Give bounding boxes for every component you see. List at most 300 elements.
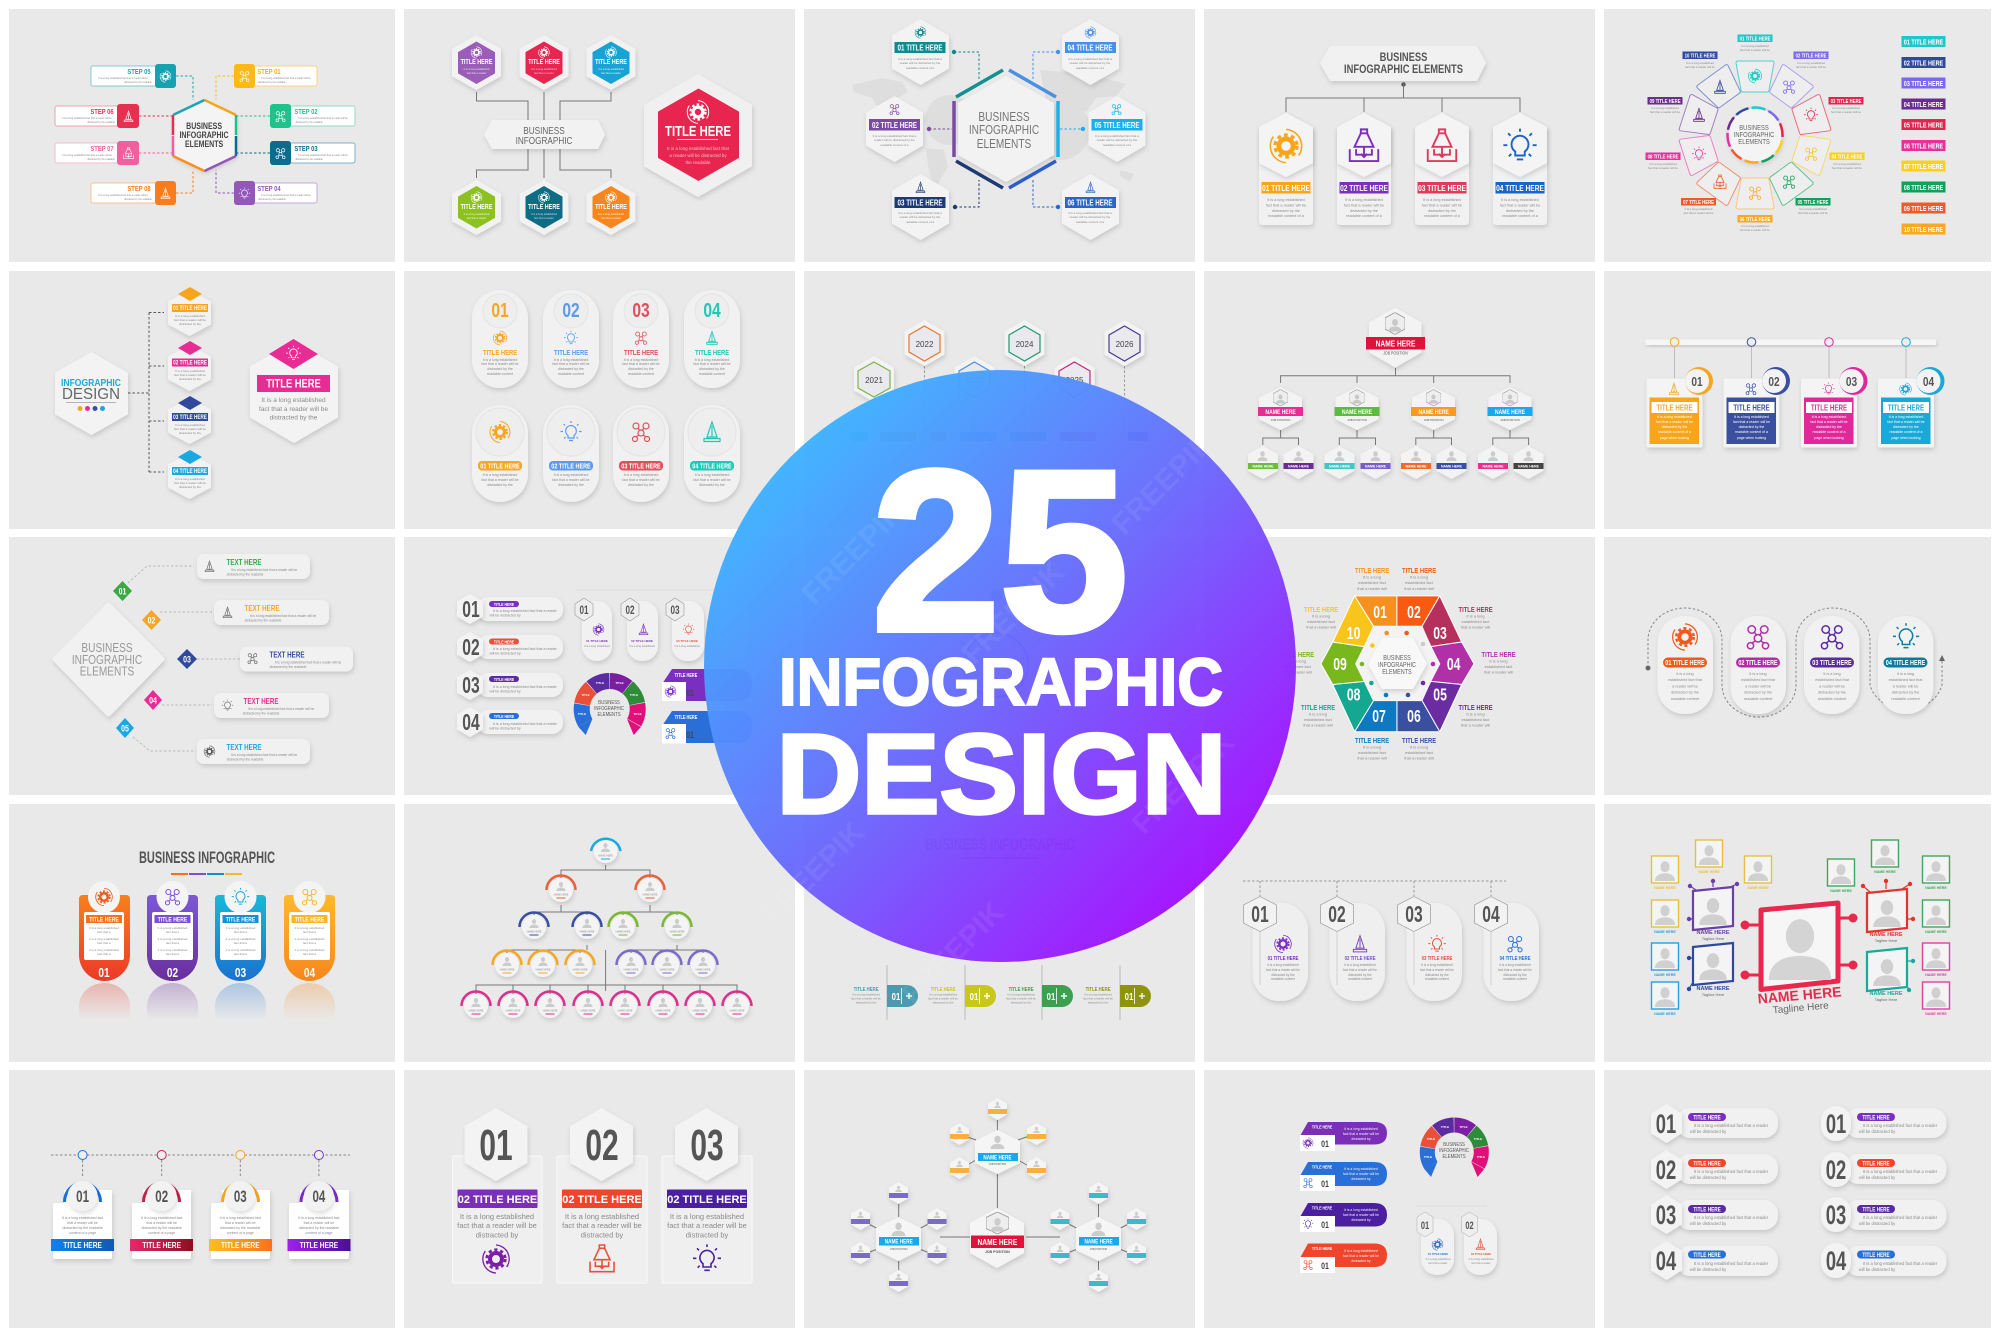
card 01: fact that a reader will be: [1266, 204, 1306, 208]
list item 04: 04: [462, 710, 480, 736]
small pill 01: 01 TITLE HERE: [1428, 1252, 1448, 1256]
pill 03: 03 TITLE HERE: [1812, 659, 1852, 667]
segment numbers: 07: [1372, 707, 1386, 727]
large title hexagon: [250, 339, 338, 443]
satellite nodes yellow: [950, 1098, 1046, 1179]
title list: 08 TITLE HERE: [1904, 184, 1943, 192]
banner 04: TITLE HERE: [1312, 1246, 1332, 1251]
segment labels: TITLE HERE: [1459, 704, 1493, 712]
card 01: readable content of a: [1268, 214, 1305, 218]
list item 04: will be distracted by: [489, 726, 521, 730]
text card 01: TEXT HERE: [227, 558, 262, 567]
text card 04: distracted by the readable: [243, 712, 280, 716]
panel: four pills with dashed path: [1604, 537, 1991, 795]
card 04: [1878, 338, 1944, 448]
number card 01: distracted by: [476, 1230, 519, 1240]
timeline card 03: TITLE HERE: [221, 1240, 260, 1250]
segment labels: TITLE HERE: [1482, 651, 1516, 659]
card 03: fact that a reader will be: [1810, 420, 1848, 424]
pill 07: It is a long established: [624, 473, 658, 477]
title banner: INFOGRAPHIC ELEMENTS: [1344, 63, 1463, 76]
level five names: NAME HERE: [543, 1010, 558, 1012]
segment labels: It is a long: [1410, 744, 1428, 750]
01 title hexagon: readable content of a: [906, 66, 934, 70]
second-level names: Tagline Here: [1702, 936, 1725, 941]
panel: timeline arc cards: [9, 1070, 395, 1328]
segment labels: established fact: [1405, 750, 1434, 755]
tab 04: [1083, 985, 1151, 1007]
column 01: 01: [98, 966, 110, 980]
segment labels: It is a long: [1309, 712, 1327, 716]
column 03: It is a long established: [226, 948, 256, 952]
card 02: 02 TITLE HERE: [1340, 183, 1388, 193]
pill 04: readable content: [1891, 697, 1921, 701]
banner 03: 01: [1321, 1220, 1329, 1230]
column 03: fact that a: [234, 941, 247, 945]
segment labels: It is a long: [1489, 658, 1508, 664]
level two names: NAME HERE: [643, 894, 658, 896]
column 04: It is a long established: [295, 926, 325, 930]
panel: diamond infographic: [9, 537, 395, 795]
list item 03: will be distracted by: [489, 690, 521, 694]
card 04: TITLE HERE: [1888, 404, 1924, 413]
pill 01: fact that a reader will be: [481, 362, 519, 366]
level five names: [469, 1010, 745, 1014]
purple hexagon: fact that a reader: [467, 71, 486, 75]
ring chart: ELEMENTS: [1443, 1154, 1466, 1160]
text card 05: It is a long established fact that a reader will be: [231, 753, 297, 757]
column 03: [215, 881, 266, 1020]
right column list: will be distracted by: [1859, 1221, 1896, 1226]
tab 02: [928, 985, 996, 1007]
second-level node green: JOB POSITION: [1347, 418, 1367, 422]
step labels: fact that a reader will be: [1650, 110, 1680, 114]
column 04: TITLE HERE: [295, 917, 324, 924]
text card 04: TEXT HERE: [244, 697, 279, 706]
column 04: 04: [304, 966, 316, 980]
card 01: [1259, 113, 1313, 225]
number card 01: [452, 1108, 542, 1283]
outer small names: NAME HERE: [1654, 1012, 1676, 1016]
item 01: distracted by the: [179, 322, 201, 326]
timeline card 01: TITLE HERE: [63, 1240, 102, 1250]
left column list: 01: [1656, 1108, 1676, 1139]
segment labels: It is a long: [1312, 614, 1330, 618]
item 02: distracted by the: [179, 377, 201, 381]
column 01: fact that a: [97, 952, 111, 956]
second-level frames: [1693, 887, 1907, 991]
step 08 card: STEP 08: [127, 185, 151, 193]
text card 03: TEXT HERE: [270, 651, 305, 660]
red hexagon: [520, 35, 568, 90]
outer small names: NAME HERE: [1874, 870, 1896, 874]
05 title hexagon: It is a long established fact that a: [1095, 134, 1139, 138]
column 02: It is a long established: [158, 926, 188, 930]
central ring: BUSINESS: [1739, 124, 1769, 132]
level five names: NAME HERE: [506, 1010, 521, 1012]
left column list: will be distracted by: [1690, 1267, 1727, 1272]
hexagon: business infographic elements: INFOGRAPHIC: [179, 130, 229, 140]
outer small names: NAME HERE: [1925, 1012, 1947, 1016]
06 title hexagon: readable content of a: [1076, 220, 1104, 224]
list item 03: It is a long established fact that a reader: [493, 685, 558, 689]
card 01: [1646, 338, 1713, 448]
segment labels: established fact: [1307, 619, 1336, 624]
tab 01: [851, 985, 918, 1007]
segment labels: It is a long: [1363, 744, 1381, 750]
number card 02: fact that a reader will be: [562, 1221, 642, 1230]
segment labels: TITLE HERE: [1402, 567, 1437, 575]
banner 04: distracted by: [1351, 1259, 1371, 1263]
pill 08: It is a long established: [695, 473, 729, 477]
card 01: distracted by the: [1662, 425, 1687, 429]
card 01: It is a long established: [1657, 415, 1692, 419]
top arc node: [591, 839, 620, 863]
level five names: NAME HERE: [581, 1010, 596, 1012]
text card 03: [240, 646, 353, 672]
left node: [876, 1217, 921, 1261]
level four names: NAME HERE: [536, 968, 551, 972]
pill 02: 02 TITLE HERE: [1738, 659, 1778, 667]
column 02: [147, 881, 198, 1020]
pill 02: [543, 290, 599, 388]
card 01: fact that a reader will be: [1656, 420, 1693, 424]
pill 01: a reader will be: [1672, 684, 1698, 688]
03 title hexagon: 03 TITLE HERE: [898, 199, 943, 208]
level five names: NAME HERE: [469, 1010, 484, 1012]
2023 hexagon: [954, 356, 994, 402]
pill 02: fact that a reader will be: [552, 362, 590, 366]
item 04: It is a long established: [1499, 963, 1531, 967]
column 02: It is a long established: [158, 937, 188, 941]
ring chart: TITLE: [596, 681, 604, 685]
number pills: [575, 598, 749, 661]
centre hexagon label: ELEMENTS: [1382, 668, 1412, 676]
satellite nodes purple: [851, 1182, 946, 1292]
step 04 card: It is a long established fact that a reader will be: [261, 194, 312, 197]
column 03: TITLE HERE: [226, 917, 255, 924]
card 04: 04 TITLE HERE: [1496, 183, 1544, 193]
card 03: It is a long established: [1812, 415, 1846, 419]
06 title hexagon: [1062, 174, 1119, 240]
right column list: 03: [1826, 1199, 1846, 1230]
step 01 card: It is a long established fact that a reader will be: [261, 77, 312, 80]
tab 03: TITLE HERE: [1009, 987, 1034, 993]
title list: 04 TITLE HERE: [1904, 101, 1943, 109]
2025 hexagon: [1054, 356, 1094, 402]
pill 06: It is a long established: [554, 473, 588, 477]
banner 01: fact that a reader will be: [1343, 1132, 1379, 1136]
number card 02: distracted by: [581, 1230, 624, 1240]
text card 01: distracted by the readable: [227, 572, 264, 576]
top node: JOB POSITION: [1383, 350, 1408, 356]
step labels: 03 TITLE HERE: [1831, 99, 1862, 105]
timeline card 03: It is a long established fact: [220, 1216, 261, 1220]
segment numbers: 03: [1433, 624, 1447, 644]
banner 04: It is a long established: [1344, 1249, 1378, 1253]
number card 02: 02 TITLE HERE: [562, 1194, 642, 1206]
number pills: 03: [671, 605, 680, 618]
right column list: TITLE HERE: [1862, 1115, 1890, 1122]
step 08 card: It is a long established fact that a reader will be: [98, 194, 149, 197]
card 02: distracted by the: [1739, 425, 1764, 429]
large title hexagon: TITLE HERE: [266, 377, 321, 391]
step 08 card: [91, 181, 176, 205]
watermarks: FREEPIK: [956, 555, 1071, 671]
01 title hexagon: [892, 19, 949, 85]
step 03 card: distracted by the readable: [295, 158, 323, 161]
2022 hexagon: [904, 320, 944, 366]
title list: 02 TITLE HERE: [1904, 60, 1943, 68]
step labels: 02 TITLE HERE: [1796, 53, 1827, 60]
badge 01: 01: [119, 587, 127, 597]
list item 02: [457, 632, 563, 662]
column 01: TITLE HERE: [89, 917, 119, 924]
centre gradient circle: [704, 370, 1296, 1011]
02 title hexagon: reader will be distracted by the: [874, 138, 915, 142]
step 07 card: It is a long established fact that a reader will be: [62, 154, 113, 157]
card 02: fact that a reader will be: [1344, 204, 1384, 208]
number card 03: It is a long established: [670, 1212, 744, 1221]
step 04 card: STEP 04: [257, 185, 281, 193]
ring chart: BUSINESS: [1443, 1142, 1466, 1148]
segment labels: that a reader will: [1461, 624, 1490, 630]
title list: 07 TITLE HERE: [1904, 163, 1943, 171]
card 01: distracted by the: [1272, 209, 1300, 213]
item 04: fact that a reader will be: [174, 481, 206, 485]
second-level node blue: JOB POSITION: [1500, 418, 1520, 422]
pill 01: 01 TITLE HERE: [1665, 659, 1705, 667]
step 06 card: distracted by the readable: [87, 121, 115, 124]
step labels: It is a long established: [1686, 61, 1714, 65]
step 05 card: STEP 05: [127, 68, 151, 76]
big red hexagon: [644, 74, 752, 197]
pill 06: [543, 405, 599, 502]
tab 01: distracted by the: [856, 1000, 877, 1004]
column 04: [284, 881, 335, 1020]
left column list: 04: [1656, 1245, 1676, 1276]
pill 01: It is a long established: [483, 358, 517, 362]
item 02: It is a long established: [1344, 963, 1376, 967]
third-level nodes: NAME HERE: [1252, 465, 1274, 469]
ring chart: [1416, 1114, 1492, 1190]
second-level node pink: NAME HERE: [1265, 410, 1296, 416]
tab 03: [1006, 985, 1073, 1007]
2024 hexagon: 2024: [1016, 340, 1034, 349]
second-level names: NAME HERE: [1869, 932, 1903, 938]
segment labels: TITLE HERE: [1301, 704, 1336, 712]
panel: arc organisation chart: [404, 804, 795, 1062]
central hexagon: [954, 70, 1058, 188]
level three names: NAME HERE: [670, 930, 685, 934]
text card 04: It is a long established fact that a reader will be: [248, 707, 314, 711]
right column list: will be distracted by: [1859, 1129, 1896, 1134]
small pill 02: 02 TITLE HERE: [1471, 1252, 1491, 1256]
tab 02: fact that a reader will be: [928, 996, 958, 1000]
text card 05: TEXT HERE: [227, 743, 262, 752]
segment labels: TITLE HERE: [1304, 606, 1339, 614]
right column list: [1821, 1106, 1946, 1278]
right column list: will be distracted by: [1859, 1175, 1896, 1180]
level four names: NAME HERE: [696, 968, 711, 972]
column 03: 03: [235, 966, 247, 980]
item 03: [1398, 896, 1462, 1001]
item 04: fact that a reader will be: [1498, 968, 1532, 972]
column 02: TITLE HERE: [158, 917, 187, 924]
top arc node: NAME HERE: [598, 854, 613, 858]
banner 04: 01: [1321, 1261, 1329, 1271]
tab 04: fact that a reader will be: [1083, 996, 1113, 1000]
panel: hexagon ring ten steps: [1204, 537, 1595, 795]
timeline card 01: content of a page: [69, 1231, 96, 1235]
ring chart: TITLE: [1477, 1155, 1485, 1159]
panel: business infographic tabs: [804, 804, 1195, 1062]
step labels: 10 TITLE HERE: [1685, 53, 1716, 60]
item 04: distracted by the: [1503, 973, 1527, 977]
card 04: distracted by the: [1893, 425, 1919, 429]
tab 01: It is a long established: [852, 992, 880, 996]
pill 04: [1878, 616, 1934, 714]
segment labels: established fact: [1462, 717, 1490, 722]
list item 01: will be distracted by: [489, 614, 521, 618]
step labels: fact that a reader will be: [1685, 65, 1715, 69]
timeline card 04: content of a page: [305, 1231, 332, 1235]
pill 04: readable content: [699, 372, 725, 376]
main hexagon: [55, 352, 128, 435]
step labels: fact that a reader will be: [1798, 211, 1828, 215]
second-level names: Tagline Here: [1702, 992, 1725, 997]
column 01: fact that a: [97, 941, 111, 945]
item 01: fact that a reader will be: [1266, 968, 1300, 972]
left column list: 03: [1656, 1199, 1676, 1230]
04 title hexagon: 04 TITLE HERE: [1068, 44, 1113, 53]
card 02: [1724, 338, 1790, 448]
2025 hexagon: 2025: [1066, 376, 1084, 385]
text card 04: [214, 693, 329, 718]
pill 02: 02: [562, 299, 580, 321]
column 04: fact that a: [303, 930, 316, 934]
card 03: TITLE HERE: [1811, 404, 1847, 413]
pill 02: distracted by the: [1744, 690, 1772, 694]
segment numbers: 08: [1347, 685, 1361, 705]
pill 04: distracted by the: [1892, 690, 1919, 694]
hexagon: business infographic elements: [173, 100, 236, 171]
small pill 02: It is a long established: [1469, 1258, 1494, 1261]
item 01: readable content: [1271, 977, 1295, 981]
step labels: 09 TITLE HERE: [1650, 99, 1681, 105]
outer small names: NAME HERE: [1654, 973, 1676, 977]
item 02: readable content: [1348, 977, 1372, 981]
left column list: It is a long established fact that a reader: [1694, 1123, 1769, 1128]
number card 03: [662, 1108, 752, 1283]
banner 01: It is a long established: [1344, 1127, 1378, 1131]
tab 04: It is a long established: [1084, 992, 1112, 996]
timeline card 03: that a reader will be: [225, 1221, 256, 1225]
pill 04: 04: [703, 299, 721, 321]
list item 04: TITLE HERE: [494, 714, 514, 719]
pill 04: It is a long: [1897, 672, 1914, 676]
pill 04: TITLE HERE: [695, 349, 730, 357]
left column list: will be distracted by: [1690, 1129, 1727, 1134]
segment labels: [1280, 567, 1516, 760]
segment labels: It is a long: [1363, 574, 1381, 580]
02 title hexagon: [866, 96, 923, 162]
hexagon: business infographic elements: ELEMENTS: [185, 139, 224, 149]
big red hexagon: TITLE HERE: [665, 123, 731, 139]
pill 03: readable content: [1818, 697, 1847, 701]
text card 02: TEXT HERE: [245, 604, 280, 613]
timeline card 03: 03: [234, 1188, 247, 1207]
pill 01: TITLE HERE: [483, 349, 518, 357]
timeline card 04: that a reader will be: [304, 1221, 334, 1225]
step labels: [1646, 34, 1864, 232]
hexagon: business infographic elements: BUSINESS: [186, 121, 223, 131]
banner 02: 01: [1321, 1179, 1329, 1189]
pill 06: 02 TITLE HERE: [551, 463, 591, 471]
centre hexagon label: INFOGRAPHIC: [1378, 661, 1416, 669]
card 03: distracted by the: [1428, 209, 1456, 213]
06 title hexagon: reader will be distracted by the: [1070, 215, 1111, 219]
step 05 card: It is a long established fact that a reader will be: [98, 77, 149, 80]
pill 04: distracted by the: [699, 367, 725, 371]
timeline card 03: content of a page: [227, 1231, 254, 1235]
badge 02: [142, 610, 161, 630]
badge 02: 02: [148, 616, 156, 626]
panel: hexagon cluster org chart: [804, 1070, 1195, 1328]
right column list: 01: [1826, 1108, 1846, 1139]
watermarks: FREEPIK: [1126, 725, 1241, 841]
number pills: 02 TITLE HERE: [631, 639, 653, 643]
panel: mixed list and ring: [404, 537, 795, 795]
small pill 01: It is a long established: [1426, 1258, 1451, 1261]
segment labels: that a reader will: [1306, 624, 1336, 630]
01 title hexagon: reader will be distracted by the: [900, 61, 941, 65]
number pills: It is a long established: [584, 644, 610, 648]
2022 hexagon: 2022: [916, 340, 934, 349]
02 title hexagon: 02 TITLE HERE: [872, 121, 917, 130]
teal hexagon: [520, 180, 568, 235]
title list: 10 TITLE HERE: [1904, 226, 1943, 234]
step 03 card: [270, 141, 355, 165]
segment labels: established fact: [1358, 580, 1387, 585]
third-level nodes: [1248, 446, 1544, 479]
segment labels: It is a long: [1466, 712, 1485, 716]
small pill 01: 01: [1421, 1218, 1429, 1231]
list item 01: [457, 594, 563, 624]
column 03: It is a long established: [226, 937, 256, 941]
right column list: 04: [1826, 1245, 1846, 1276]
central banner: [484, 120, 605, 149]
05 title hexagon: reader will be distracted by the: [1097, 138, 1138, 142]
list item 04: It is a long established fact that a reader: [493, 722, 558, 726]
card 02: TITLE HERE: [1733, 404, 1770, 413]
main name: [1757, 983, 1843, 1018]
card 01: readable content of a: [1658, 430, 1691, 434]
level five names: NAME HERE: [693, 1010, 708, 1012]
red hexagon: TITLE HERE: [528, 58, 560, 66]
main node: JOB POSITION: [985, 1250, 1010, 1254]
second-level node orange: NAME HERE: [1419, 410, 1449, 416]
step 06 card: STEP 06: [90, 108, 114, 116]
04 title hexagon: [1062, 19, 1119, 85]
timeline card 02: [130, 1150, 193, 1259]
02 title hexagon: It is a long established fact that a: [873, 134, 917, 138]
2021 hexagon: 2021: [865, 376, 883, 385]
segment numbers: 01: [1373, 603, 1387, 623]
step labels: 07 TITLE HERE: [1683, 200, 1715, 206]
tab 04: TITLE HERE: [1086, 987, 1111, 993]
03 title hexagon: reader will be distracted by the: [900, 215, 941, 219]
